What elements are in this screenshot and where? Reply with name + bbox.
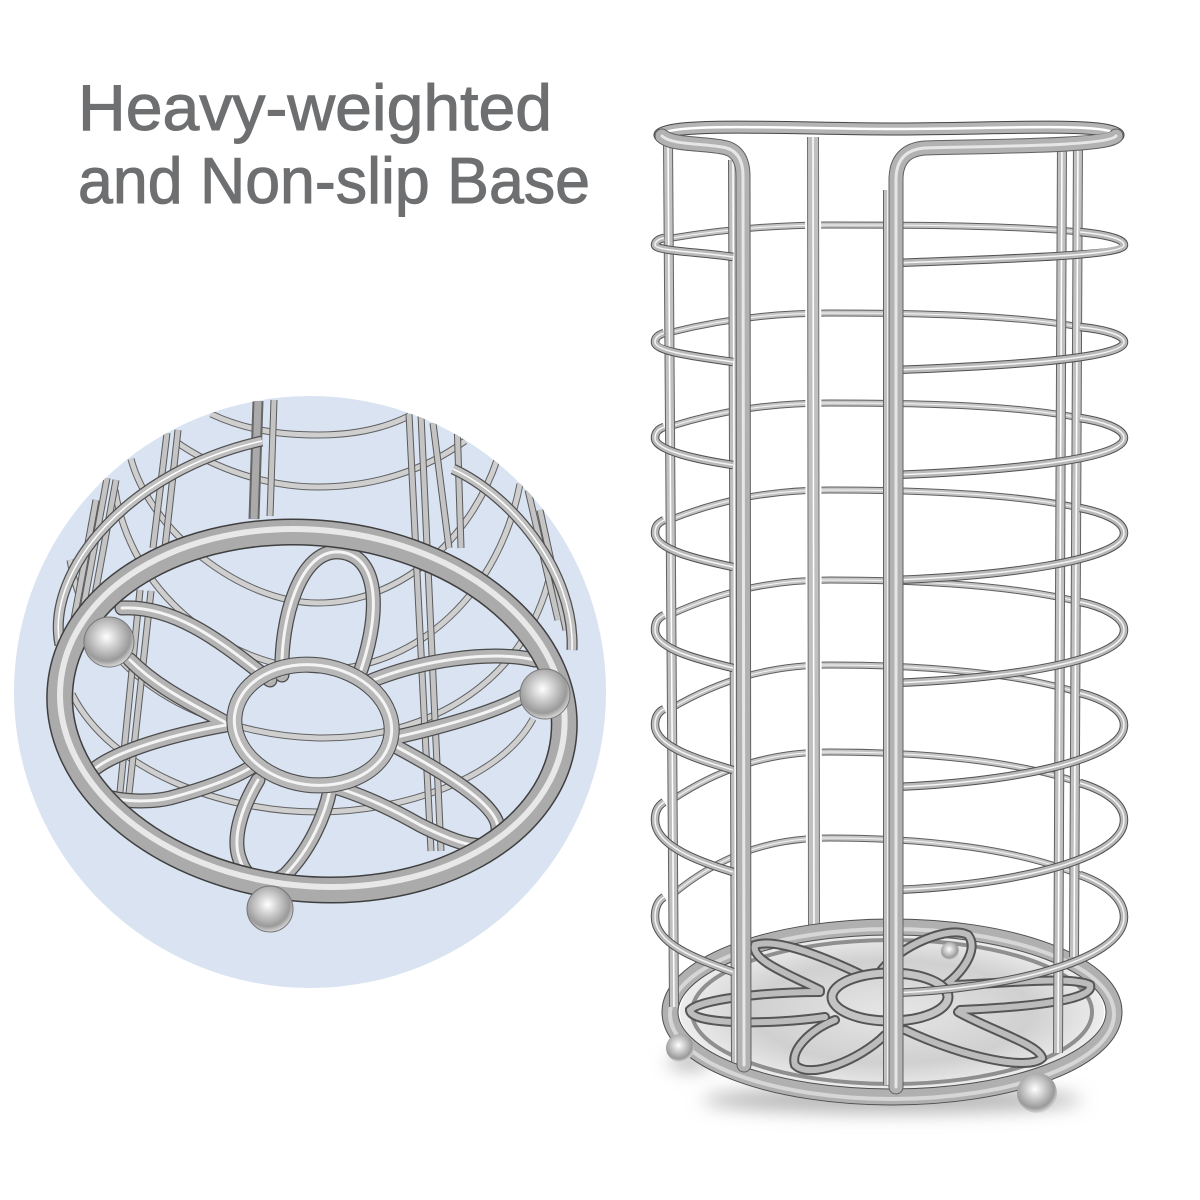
base floor shading [680,934,1104,1090]
title: Heavy-weighted and Non-slip Base: Heavy-weighted [78,71,552,144]
base ring [670,927,1114,1099]
base flower [690,932,1090,1070]
title: Heavy-weighted and Non-slip Base: and Non-slip Base [78,144,590,217]
back centre bar [813,137,814,928]
blue circle background [14,396,606,988]
panel: full wire holder product [655,127,1124,1113]
title: Heavy-weighted and Non-slip Base [78,71,590,217]
side vertical bars [668,140,1078,1085]
back rings [672,225,1080,895]
panel: close-up of base on blue circle [14,396,606,988]
back top rim [660,127,1118,135]
front hairpin wires with top rim ends [662,136,1116,1087]
foot balls [84,617,570,932]
back wires of holder, clipped to circle [58,400,572,851]
flower base pattern [86,552,535,881]
outer base rim [42,505,583,914]
front rings [655,232,1124,993]
floor shadow [668,1054,1082,1113]
feet [666,942,1057,1113]
